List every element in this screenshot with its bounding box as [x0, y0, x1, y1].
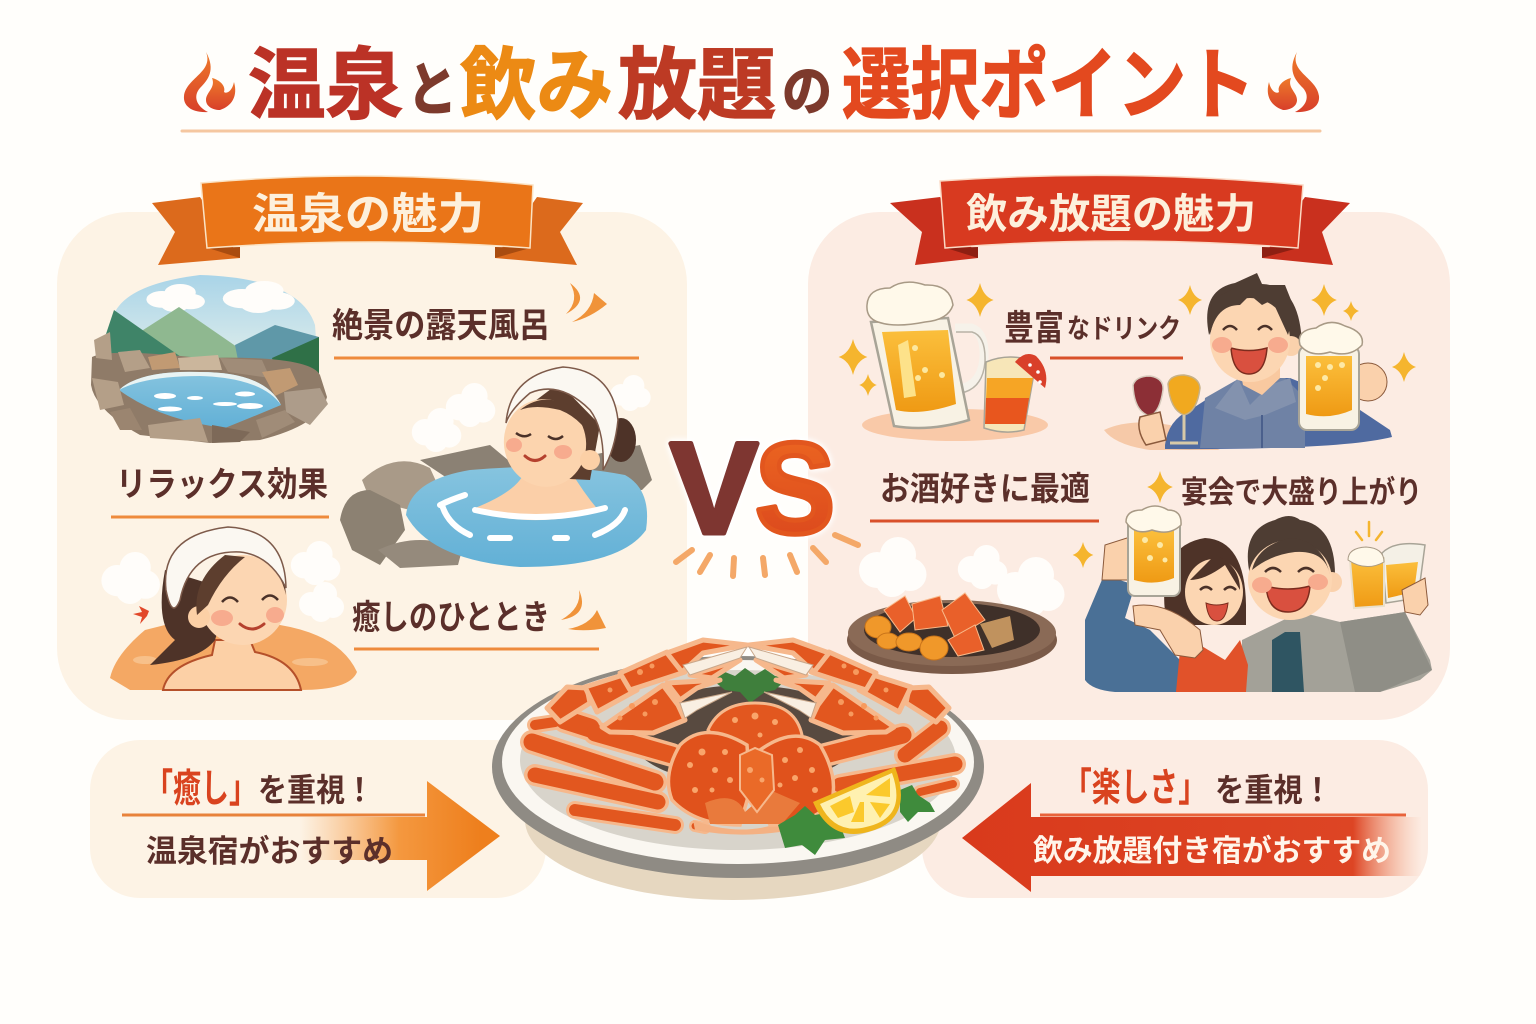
label: rich drinks: 豊富 — [1004, 309, 1064, 348]
title word: selection points: 選択ポイント — [842, 41, 1255, 129]
text: emphasis right: を重視！ — [1215, 772, 1332, 808]
label: rich drinks — [1004, 309, 1183, 358]
title word: to: と — [407, 58, 457, 123]
label: for drinkers: お酒好きに最適 — [880, 470, 1090, 507]
label: party: 宴会で大盛り上がり — [1181, 475, 1422, 510]
illustration: friends toasting — [1073, 506, 1432, 692]
plate — [492, 656, 984, 900]
icon: right flame — [1268, 52, 1319, 112]
parsley top — [710, 668, 788, 703]
arrow: orange — [300, 781, 500, 891]
parsley and lemon — [778, 767, 935, 855]
icon: mountain open-air bath — [91, 275, 328, 443]
panel: healing recommendation — [90, 740, 546, 898]
label: healing moment — [352, 590, 606, 649]
ribbon: onsen heading: 温泉の魅力 — [252, 191, 484, 239]
text: emphasis left: を重視！ — [258, 772, 374, 808]
VS badge: S — [755, 415, 835, 561]
illustration: crab platter — [492, 640, 984, 900]
title word: nomi: 飲み — [460, 41, 613, 129]
text: onsen inn recommended: 温泉宿がおすすめ — [146, 834, 393, 869]
text: drink inn recommended: 飲み放題付き宿がおすすめ — [1033, 834, 1391, 868]
label: healing moment: 癒しのひととき — [352, 599, 550, 637]
ribbon: drink heading — [890, 175, 1350, 265]
text: healing focus: 「癒し」 — [145, 768, 257, 811]
icon: left flame — [184, 52, 235, 112]
label: relax effect: リラックス効果 — [116, 466, 328, 504]
text: fun focus: 「楽しさ」 — [1063, 767, 1207, 810]
VS badge: V — [670, 415, 758, 561]
claws right — [749, 640, 949, 733]
panel: all-you-can-drink appeal — [808, 175, 1450, 720]
label: rich drinks: なドリンク — [1067, 314, 1181, 344]
claws left — [547, 640, 747, 733]
illustration: beer mug and cocktail — [839, 282, 1048, 441]
title word: no: の — [782, 62, 832, 122]
burst rays — [676, 535, 858, 576]
crab legs — [532, 720, 955, 828]
illustration: woman in hot spring — [340, 367, 652, 568]
title word: hodai: 放題 — [618, 41, 776, 129]
ribbon: onsen heading — [152, 176, 583, 265]
ribbon: drink heading: 飲み放題の魅力 — [966, 191, 1256, 237]
label: scenic bath — [332, 283, 639, 358]
illustration: grilled food plate — [847, 537, 1064, 674]
illustration: woman smiling in bath — [101, 527, 357, 690]
label: scenic bath: 絶景の露天風呂 — [332, 307, 550, 345]
title — [182, 41, 1320, 131]
panel: fun recommendation — [922, 740, 1428, 898]
arrow: red — [962, 783, 1422, 892]
crab body — [668, 703, 834, 835]
illustration: man with beer and wine — [1104, 273, 1416, 450]
VS badge — [670, 415, 858, 576]
title word: onsen: 温泉 — [248, 41, 403, 129]
panel: onsen appeal — [57, 176, 687, 720]
